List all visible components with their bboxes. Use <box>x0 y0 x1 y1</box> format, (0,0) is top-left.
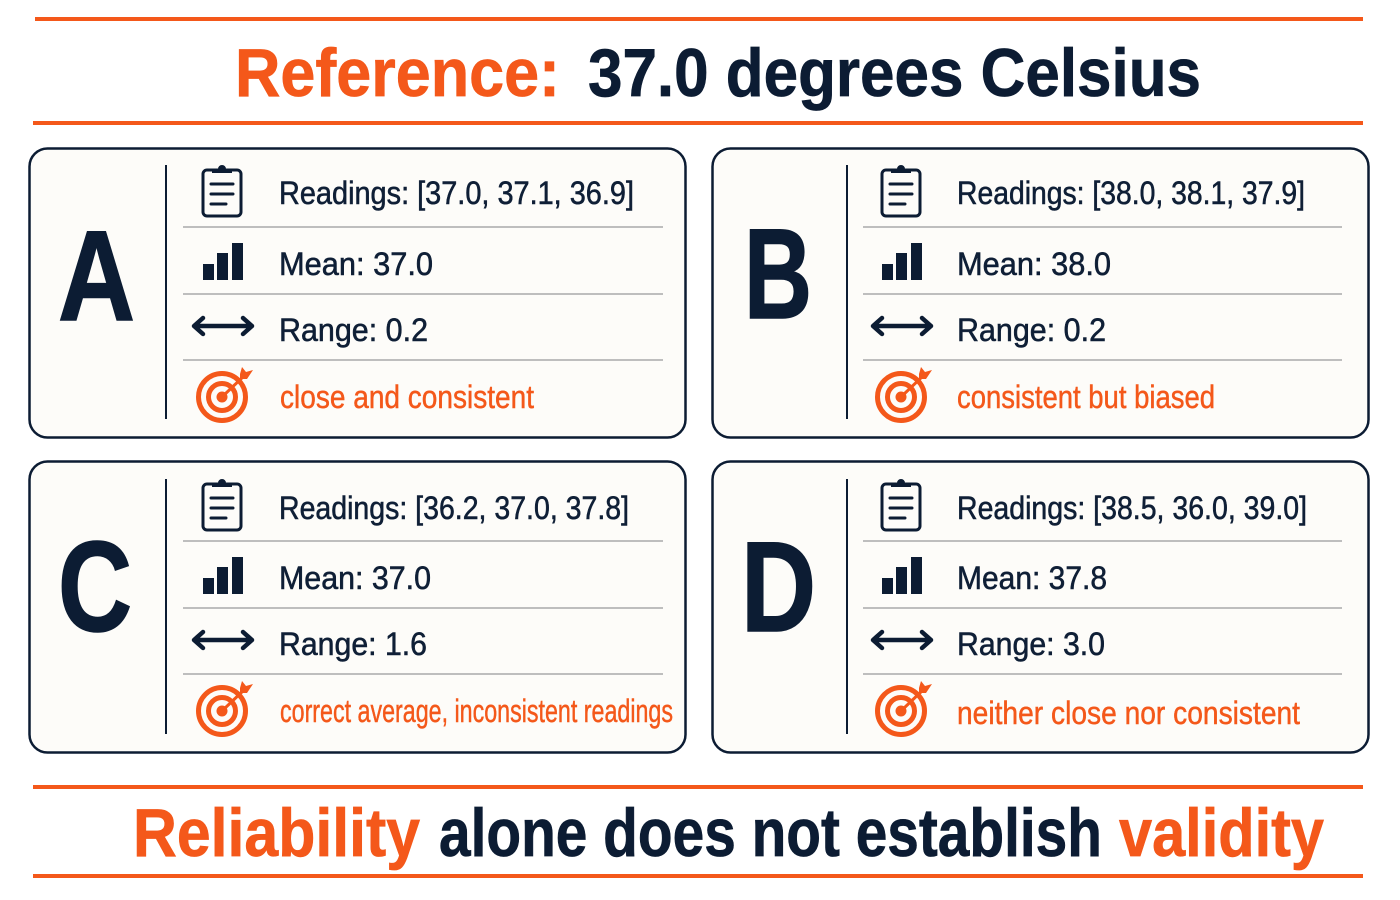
readings A: Readings: [37.0, 37.1, 36.9] <box>279 175 634 211</box>
mean D: Mean: 37.8 <box>957 560 1107 596</box>
range B: Range: 0.2 <box>957 312 1106 348</box>
icon: clipboard <box>882 479 920 530</box>
letter D: D <box>741 516 816 659</box>
conclusion: middle: alone does not establish <box>439 795 1102 871</box>
letter B: B <box>744 203 812 346</box>
range C: Range: 1.6 <box>279 626 427 662</box>
title: reference value: 37.0 degrees Celsius <box>588 35 1201 111</box>
icon: target <box>198 367 253 420</box>
icon: clipboard <box>203 479 241 530</box>
verdict D: neither close nor consistent <box>957 695 1300 731</box>
icon: bar chart <box>882 243 922 280</box>
icon: target <box>198 681 253 734</box>
title: reference label: Reference: <box>235 35 560 111</box>
icon: target <box>878 681 932 734</box>
mean B: Mean: 38.0 <box>957 246 1111 282</box>
panel: C <box>30 462 686 752</box>
letter A: A <box>58 205 135 348</box>
range A: Range: 0.2 <box>279 312 428 348</box>
icon: clipboard <box>882 165 920 216</box>
icon: range arrow <box>873 632 931 648</box>
mean C: Mean: 37.0 <box>279 560 431 596</box>
verdict C: correct average, inconsistent readings <box>280 693 673 729</box>
panel: A <box>30 148 686 438</box>
verdict A: close and consistent <box>280 379 534 415</box>
icon: clipboard <box>203 165 241 216</box>
icon: bar chart <box>203 243 243 280</box>
icon: bar chart <box>882 557 922 594</box>
conclusion: reliability: Reliability <box>133 795 420 871</box>
verdict B: consistent but biased <box>957 379 1215 415</box>
panel: B <box>712 148 1368 438</box>
conclusion: validity: validity <box>1119 795 1324 871</box>
panel: D <box>712 462 1368 752</box>
icon: target <box>878 367 932 420</box>
icon: range arrow <box>194 318 252 334</box>
readings D: Readings: [38.5, 36.0, 39.0] <box>957 490 1307 526</box>
range D: Range: 3.0 <box>957 626 1105 662</box>
readings C: Readings: [36.2, 37.0, 37.8] <box>279 490 629 526</box>
conclusion band <box>33 785 1363 878</box>
mean A: Mean: 37.0 <box>279 246 433 282</box>
icon: range arrow <box>194 632 252 648</box>
icon: bar chart <box>203 557 243 594</box>
title band <box>33 17 1363 125</box>
icon: range arrow <box>873 318 931 334</box>
readings B: Readings: [38.0, 38.1, 37.9] <box>957 175 1305 211</box>
letter C: C <box>58 516 132 659</box>
